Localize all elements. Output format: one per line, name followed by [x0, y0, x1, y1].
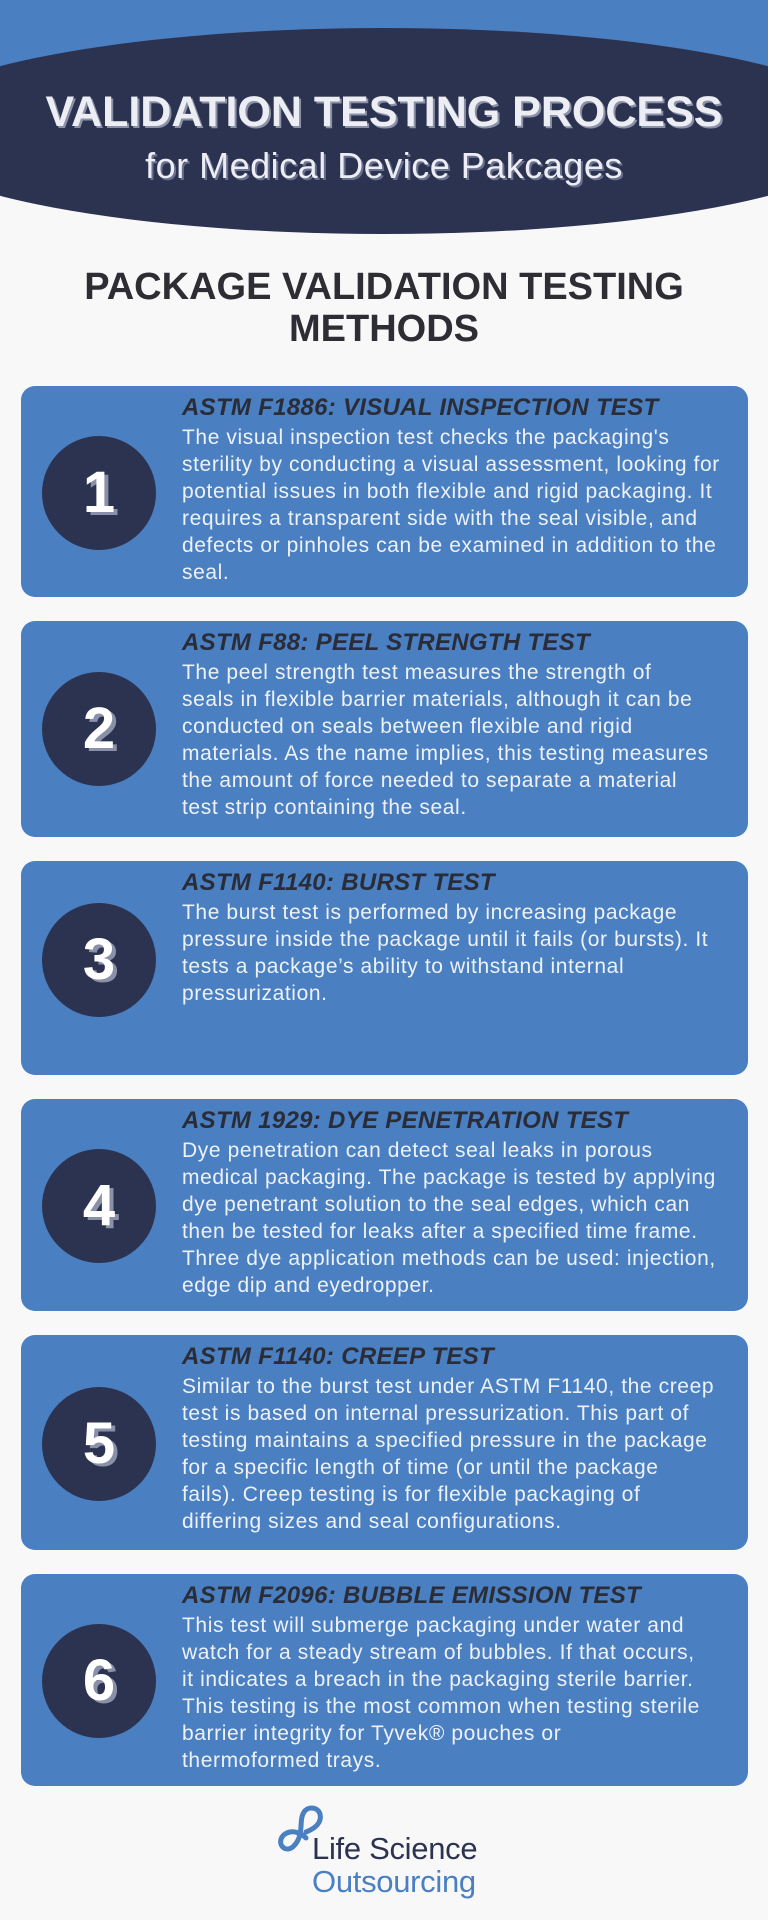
card 6 text — [182, 1614, 700, 1772]
header ellipse — [0, 28, 768, 234]
panel: card 6 — [21, 1574, 748, 1786]
card 1 text: The visual inspection test checks the packaging's — [182, 426, 670, 449]
card 1 text: requires a transparent side with the seal visible, and — [182, 507, 698, 530]
number 5 — [42, 1387, 156, 1501]
number 6 — [42, 1624, 156, 1738]
card 1 text: defects or pinholes can be examined in addition to the — [182, 534, 716, 557]
card 6 title: ASTM F2096: BUBBLE EMISSION TEST — [182, 1582, 641, 1609]
card 2 text: The peel strength test measures the strength of — [182, 661, 651, 684]
card 3 text: The burst test is performed by increasing package — [182, 901, 677, 924]
card 5 text: testing maintains a specified pressure in the package — [182, 1429, 708, 1452]
header background band — [0, 0, 768, 180]
section heading: METHODS — [289, 308, 479, 350]
card 2 text: the amount of force needed to separate a material — [182, 769, 677, 792]
number 4 — [42, 1149, 156, 1263]
title: VALIDATION TESTING PROCESS — [46, 88, 722, 136]
card 3 text: pressurization. — [182, 982, 328, 1005]
card 1 text: seal. — [182, 561, 229, 584]
card 2 text: test strip containing the seal. — [182, 796, 467, 819]
logo text: Life Science — [312, 1831, 477, 1866]
card 2 title: ASTM F88: PEEL STRENGTH TEST — [182, 629, 590, 656]
panel: card 4 — [21, 1099, 748, 1311]
section heading: PACKAGE VALIDATION TESTING — [84, 266, 684, 308]
card 4 text: then be tested for leaks after a specified time frame. — [182, 1220, 698, 1243]
card 4 text: Dye penetration can detect seal leaks in porous — [182, 1139, 653, 1162]
card 6 text: This testing is the most common when testing sterile — [182, 1695, 700, 1718]
panel: card 1 — [21, 386, 748, 597]
number 6: 6 — [83, 1648, 115, 1713]
panel: card 5 — [21, 1335, 748, 1550]
logo text — [312, 1831, 477, 1899]
card 3 title: ASTM F1140: BURST TEST — [182, 869, 495, 896]
card 1 text: sterility by conducting a visual assessment, looking for — [182, 453, 720, 476]
card 4 text: medical packaging. The package is tested by applying — [182, 1166, 716, 1189]
number 2: 2 — [83, 696, 115, 761]
logo — [278, 1806, 477, 1899]
card 1 text: potential issues in both flexible and rigid packaging. It — [182, 480, 712, 503]
number 5: 5 — [83, 1411, 115, 1476]
card 6 text: it indicates a breach in the packaging sterile barrier. — [182, 1668, 694, 1691]
card 3 text: pressure inside the package until it fails (or bursts). It — [182, 928, 708, 951]
card 4 text: Three dye application methods can be used: injection, — [182, 1247, 716, 1270]
number 4: 4 — [83, 1173, 115, 1238]
card 5 text: test is based on internal pressurization. This part of — [182, 1402, 689, 1425]
card 6 text: barrier integrity for Tyvek® pouches or — [182, 1722, 561, 1745]
card 6 text: thermoformed trays. — [182, 1749, 381, 1772]
card 3 text — [182, 901, 708, 1005]
card 5 text: differing sizes and seal configurations. — [182, 1510, 562, 1533]
card 5 text: Similar to the burst test under ASTM F1140, the creep — [182, 1375, 714, 1398]
card 6 text: watch for a steady stream of bubbles. If that occurs, — [182, 1641, 695, 1664]
card 4 text: dye penetrant solution to the seal edges, which can — [182, 1193, 690, 1216]
card 2 text: conducted on seals between flexible and rigid — [182, 715, 633, 738]
panel: card 2 — [21, 621, 748, 837]
card 3 text: tests a package’s ability to withstand internal — [182, 955, 624, 978]
number 3 — [42, 903, 156, 1017]
card 4 text: edge dip and eyedropper. — [182, 1274, 435, 1297]
card 2 text: materials. As the name implies, this testing measures — [182, 742, 709, 765]
card 1 title: ASTM F1886: VISUAL INSPECTION TEST — [182, 394, 659, 421]
number 3: 3 — [83, 927, 115, 992]
number 1: 1 — [83, 460, 115, 525]
card 2 text: seals in flexible barrier materials, although it can be — [182, 688, 692, 711]
card 2 text — [182, 661, 709, 819]
section heading — [84, 266, 684, 350]
card 5 text — [182, 1375, 714, 1533]
card 4 title: ASTM 1929: DYE PENETRATION TEST — [182, 1107, 628, 1134]
card 6 text: This test will submerge packaging under water and — [182, 1614, 684, 1637]
icon: logo mark — [278, 1806, 323, 1852]
subtitle: for Medical Device Pakcages — [145, 145, 623, 186]
number 2 — [42, 672, 156, 786]
card 5 text: for a specific length of time (or until the package — [182, 1456, 659, 1479]
logo text: Outsourcing — [312, 1864, 476, 1899]
card 4 text — [182, 1139, 716, 1297]
card 1 text — [182, 426, 720, 584]
number 1 — [42, 436, 156, 550]
card 5 text: fails). Creep testing is for flexible packaging of — [182, 1483, 640, 1506]
card 5 title: ASTM F1140: CREEP TEST — [182, 1343, 494, 1370]
panel: card 3 — [21, 861, 748, 1075]
